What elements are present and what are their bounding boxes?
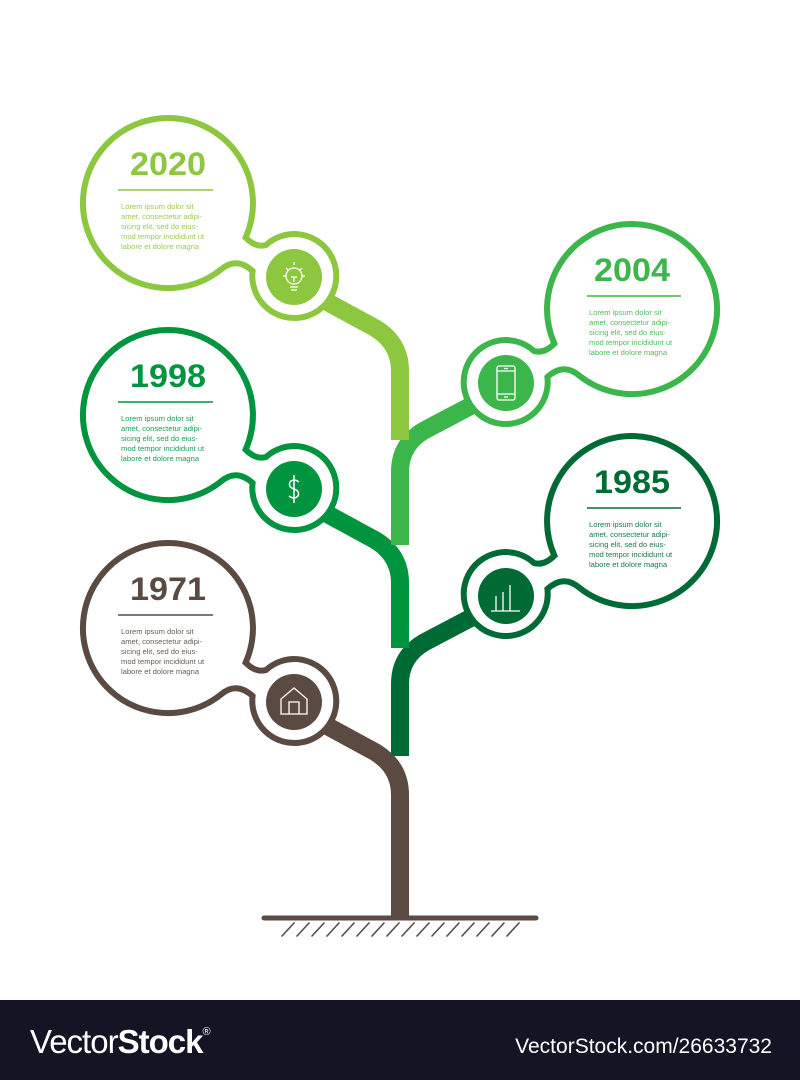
icon: bar chart — [491, 585, 520, 611]
node 1971: mod tempor incididunt ut — [121, 657, 205, 666]
icon: light bulb — [283, 262, 305, 290]
branch 2020 — [318, 297, 400, 440]
branch 1998 — [318, 509, 400, 648]
node 1998: labore et dolore magna — [121, 454, 200, 463]
node 1998: Lorem ipsum dolor sit — [121, 414, 194, 423]
node 2004: 2004 — [594, 252, 670, 288]
node 1998 — [83, 330, 336, 530]
icon: dollar — [289, 475, 299, 503]
footer bar: VectorStock — [30, 1023, 202, 1060]
node 1971: sicing elit, sed do eius- — [121, 647, 198, 656]
node 1971: labore et dolore magna — [121, 667, 200, 676]
node 1998: sicing elit, sed do eius- — [121, 434, 198, 443]
node 1985: labore et dolore magna — [589, 560, 668, 569]
node 1985: mod tempor incididunt ut — [589, 550, 673, 559]
node 2004 — [464, 224, 717, 424]
node 1985: 1985 — [594, 464, 670, 500]
node 1971: amet, consectetur adipi- — [121, 637, 203, 646]
node 1985: sicing elit, sed do eius- — [589, 540, 666, 549]
branch 2004 — [400, 400, 482, 545]
node 1985 — [464, 436, 717, 636]
node 1998: amet, consectetur adipi- — [121, 424, 203, 433]
branch 1985 — [400, 612, 482, 756]
node 1998: mod tempor incididunt ut — [121, 444, 205, 453]
footer bar: VectorStock.com/26633732 — [515, 1035, 772, 1058]
node 2020: amet, consectetur adipi- — [121, 212, 203, 221]
node 2020: mod tempor incididunt ut — [121, 232, 205, 241]
ground — [264, 918, 536, 936]
node 1971: 1971 — [130, 571, 206, 607]
node 1998: 1998 — [130, 358, 206, 394]
icon: phone — [497, 366, 515, 400]
node 2004: mod tempor incididunt ut — [589, 338, 673, 347]
branches of tree — [318, 297, 482, 918]
footer bar: ® — [202, 1026, 210, 1038]
node 1971: Lorem ipsum dolor sit — [121, 627, 194, 636]
node 1971 — [83, 543, 336, 743]
footer bar — [0, 1000, 800, 1080]
node 2020: labore et dolore magna — [121, 242, 200, 251]
node 2004: sicing elit, sed do eius- — [589, 328, 666, 337]
node 2004: amet, consectetur adipi- — [589, 318, 671, 327]
node 1985: Lorem ipsum dolor sit — [589, 520, 662, 529]
branch 1971 trunk — [318, 721, 400, 918]
node 2004: Lorem ipsum dolor sit — [589, 308, 662, 317]
node 1985: amet, consectetur adipi- — [589, 530, 671, 539]
icon: house — [281, 688, 307, 714]
node 2020: 2020 — [130, 146, 206, 182]
node 2020: Lorem ipsum dolor sit — [121, 202, 194, 211]
node 2004: labore et dolore magna — [589, 348, 668, 357]
node 2020 — [83, 118, 336, 318]
node 2020: sicing elit, sed do eius- — [121, 222, 198, 231]
